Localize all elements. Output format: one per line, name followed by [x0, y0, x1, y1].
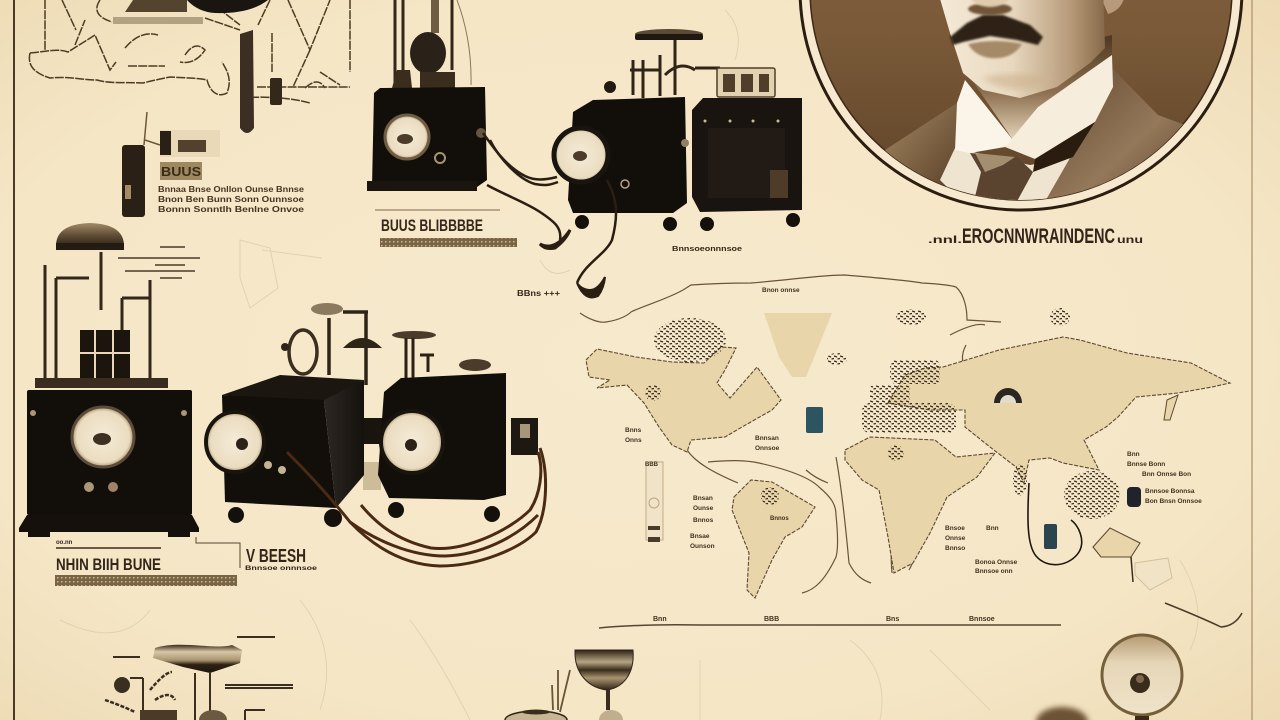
cable plugs — [540, 230, 605, 297]
fittings on boxes — [311, 303, 343, 315]
middle pair apparatus — [206, 303, 538, 527]
small device caption — [158, 162, 305, 214]
north america — [586, 347, 781, 452]
map labels: Bnsae — [690, 533, 710, 540]
bottom goblet apparatus — [505, 650, 633, 720]
map labels: Bnnsan — [755, 435, 779, 442]
africa — [845, 437, 995, 573]
nose tip — [968, 0, 1012, 7]
map labels: Bnns — [625, 427, 642, 434]
centre caption: Bnnsoeonnnsoe — [672, 246, 742, 253]
top-left sketch — [29, 0, 350, 103]
map labels: Bnnse Bonn — [1127, 461, 1165, 468]
map labels: Bnnsoe onn — [975, 568, 1013, 575]
eurasia — [888, 337, 1230, 483]
map baseline — [599, 625, 1061, 628]
map labels: Onnsoe — [755, 445, 780, 452]
lower left caption: oo.nn — [56, 540, 73, 546]
jacket left — [885, 103, 957, 187]
connector between boxes — [360, 418, 384, 444]
world map: Bnn — [653, 616, 667, 623]
bottom-right dark blob — [1036, 707, 1088, 720]
bottom-right horn speaker — [1102, 635, 1182, 720]
map labels: Bnn — [986, 525, 999, 532]
portrait caption: .nnl. — [928, 235, 962, 246]
centre caption — [375, 210, 742, 298]
map labels: Bon Bnsn Onnsoe — [1145, 498, 1202, 505]
small device with labels — [122, 112, 220, 217]
lower left caption: Bnnsoe onnnsoe — [245, 566, 318, 572]
portrait caption: EROCNNWRAINDENC — [962, 225, 1115, 248]
map labels: Bnon onnse — [762, 287, 800, 294]
small device caption: Bnnaa Bnse Onllon Ounse Bnnse — [158, 185, 305, 194]
lower cables — [287, 448, 546, 566]
shirt — [940, 148, 1070, 205]
tie — [970, 153, 1033, 205]
bottom-left sketch apparatus — [105, 637, 293, 720]
nose shadow — [968, 3, 1012, 15]
map left legend bar — [645, 462, 663, 542]
world map: Bns — [886, 616, 899, 623]
world map: Bnnsoe — [969, 616, 995, 623]
stippled island clusters — [645, 308, 1120, 519]
left large apparatus — [19, 223, 199, 537]
lower left caption: NHIN BIIH BUNE — [56, 555, 161, 574]
centre caption: BBns +++ — [517, 289, 560, 298]
face — [936, 0, 1105, 98]
top-left dome — [113, 0, 268, 24]
top centre apparatus: single box — [367, 0, 487, 191]
tie band — [1033, 122, 1095, 172]
map labels: Onns — [625, 437, 642, 444]
map labels: Bnn Onnse Bon — [1142, 471, 1191, 478]
ear — [1104, 0, 1124, 14]
map labels: Onnse — [945, 535, 966, 542]
map labels: Bnnsoe Bonnsa — [1145, 488, 1195, 495]
map left legend bar: BBB — [645, 462, 659, 468]
map labels: Bnn — [1127, 451, 1140, 458]
right collar — [1005, 55, 1113, 159]
turntable and fittings — [635, 29, 703, 39]
jacket right — [1040, 68, 1185, 205]
centre caption: BUUS BLIBBBBE — [381, 216, 483, 235]
lower left caption: V BEESH — [246, 546, 306, 566]
map labels: Bnnos — [693, 517, 714, 524]
map labels: Bnsan — [693, 495, 713, 502]
moustache — [950, 15, 1043, 45]
map labels: Bonoa Onnse — [975, 559, 1018, 566]
kamchatka sea — [1164, 395, 1178, 420]
map labels: Ounson — [690, 543, 715, 550]
lower left caption — [55, 537, 318, 586]
chin shadow — [982, 74, 1052, 89]
top centre apparatus: connected pair — [554, 29, 802, 231]
map labels: Ounse — [693, 505, 714, 512]
top-left vertical probe — [240, 30, 282, 133]
outer route lines — [580, 275, 1001, 593]
australia — [1093, 528, 1140, 557]
map labels: Bnnos — [770, 516, 789, 522]
map labels: Bnsoe — [945, 525, 965, 532]
world map — [580, 275, 1242, 628]
left collar — [955, 80, 1013, 153]
map markers — [806, 388, 1141, 565]
greenland — [764, 313, 832, 377]
lip — [968, 41, 1022, 58]
portrait medallion — [800, 0, 1242, 210]
world map: BBB — [764, 616, 779, 623]
small device caption: BUUS — [161, 164, 201, 179]
map labels: Bnnso — [945, 545, 965, 552]
south america — [732, 480, 815, 598]
neck — [965, 35, 1112, 140]
small device caption: Bonnn Sonntlh Benlne Onvoe — [158, 205, 305, 214]
portrait caption: unu — [1117, 235, 1143, 246]
map labels — [625, 287, 1202, 575]
cables — [483, 133, 616, 283]
left apparatus annotation — [118, 247, 200, 278]
small device caption: Bnon Ben Bunn Sonn Ounnsoe — [158, 195, 305, 204]
